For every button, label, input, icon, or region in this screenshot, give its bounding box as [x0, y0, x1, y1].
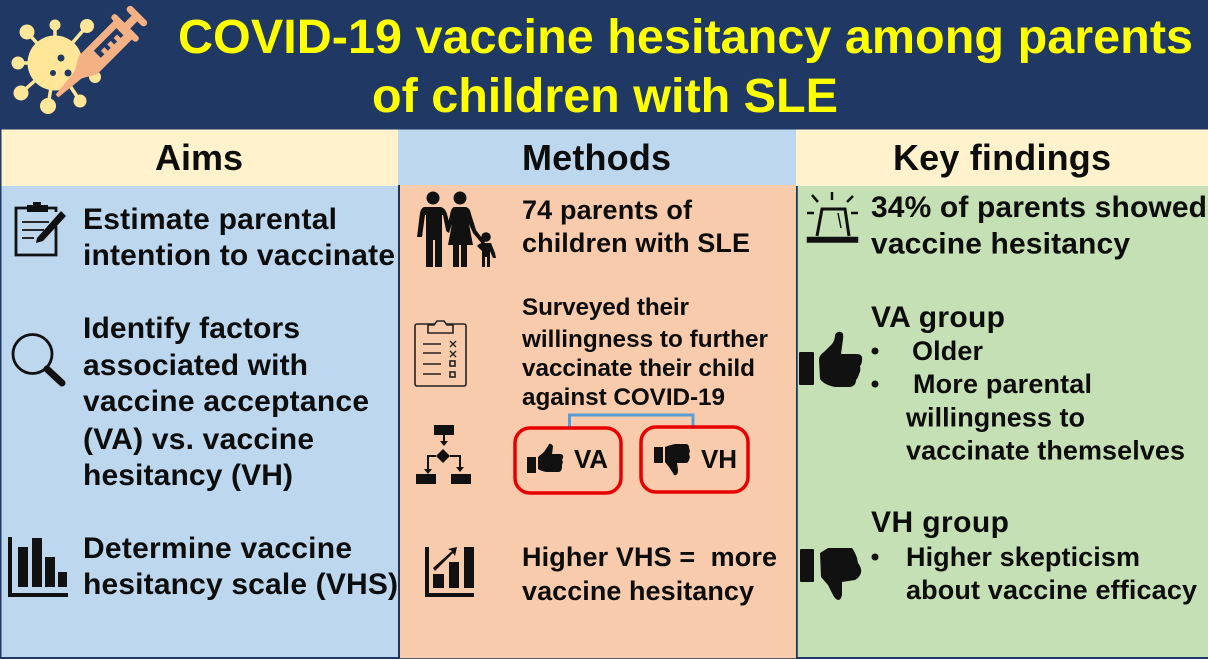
text: VH group: VH group [871, 506, 1009, 539]
icon: thumbs up [527, 444, 563, 473]
icon: rising bar chart [425, 547, 474, 597]
title text: of children with SLE [372, 69, 838, 123]
panel: aims [8, 202, 398, 601]
heading: Key findings: Key findings [893, 137, 1111, 178]
icon: thumbs down [654, 444, 690, 475]
text: participants: 74 parents of [522, 195, 693, 225]
text: VH group [871, 506, 1197, 605]
box: VA [515, 428, 621, 493]
icon: magnifying glass [13, 334, 62, 383]
connector: VA and VH bracket [570, 415, 693, 428]
text: finding 1 [871, 191, 1207, 260]
heading: Aims: Aims [155, 137, 243, 178]
text: VHS: vaccine hesitancy [522, 576, 754, 606]
text: VA group: Older [912, 336, 983, 366]
box: VH: VH [701, 444, 737, 474]
text: aim 2: Identify factors [83, 312, 300, 345]
icon: thumbs up large [799, 332, 862, 387]
text: finding 1: 34% of parents showed [871, 191, 1207, 224]
title banner [12, 1, 1193, 123]
text: aim 2: associated with [83, 349, 308, 382]
heading: Aims [2, 130, 398, 186]
heading: Key findings [796, 130, 1208, 186]
panel: key findings [799, 191, 1207, 605]
text: survey: against COVID-19 [522, 384, 725, 411]
icon: bar chart [8, 537, 68, 597]
text: participants [522, 195, 750, 258]
text: VA group [871, 301, 1185, 466]
text: aim 2: vaccine acceptance [83, 385, 369, 418]
panel: methods [415, 192, 777, 606]
box: VA: VA [574, 444, 608, 474]
icon: thumbs down large [800, 548, 861, 600]
title text [178, 10, 1193, 123]
heading: Methods [398, 130, 796, 185]
text: survey: willingness to further [521, 326, 769, 353]
text: VHS [522, 542, 777, 606]
text: VH group: about vaccine efficacy [906, 575, 1197, 605]
text: survey: Surveyed their [522, 294, 690, 321]
text: survey [521, 294, 769, 411]
text: survey: vaccinate their child [522, 355, 755, 382]
icon: family [417, 192, 496, 267]
box: VH [641, 427, 748, 492]
text: aim 2: (VA) vs. vaccine [83, 423, 314, 456]
icon: alarm siren [807, 192, 858, 242]
text: aim 2: hesitancy (VH) [83, 459, 293, 492]
text: aim 3: Determine vaccine [83, 532, 352, 565]
text: participants: children with SLE [522, 228, 750, 258]
text: VH group: Higher skepticism [906, 542, 1140, 572]
text: aim 3 [83, 532, 398, 601]
text: aim 1: intention to vaccinate [83, 239, 395, 272]
text: VA group: VA group [871, 301, 1005, 334]
text: aim 2 [83, 312, 369, 492]
text: aim 3: hesitancy scale (VHS) [83, 568, 398, 601]
icon: virus and syringe [12, 1, 152, 114]
text: aim 1 [83, 203, 395, 272]
icon: survey checklist [415, 321, 466, 386]
icon: flowchart [416, 425, 471, 484]
text: VA group: willingness to [905, 402, 1085, 432]
text: VA group: More parental [913, 369, 1092, 399]
text: finding 1: vaccine hesitancy [871, 228, 1130, 260]
title text: COVID-19 vaccine hesitancy among parents [178, 10, 1193, 64]
heading: Methods: Methods [522, 137, 671, 178]
icon: clipboard with pen [16, 202, 66, 255]
text: aim 1: Estimate parental [83, 203, 337, 236]
text: VA group: vaccinate themselves [906, 436, 1185, 466]
text: VHS: Higher VHS = more [522, 542, 777, 572]
